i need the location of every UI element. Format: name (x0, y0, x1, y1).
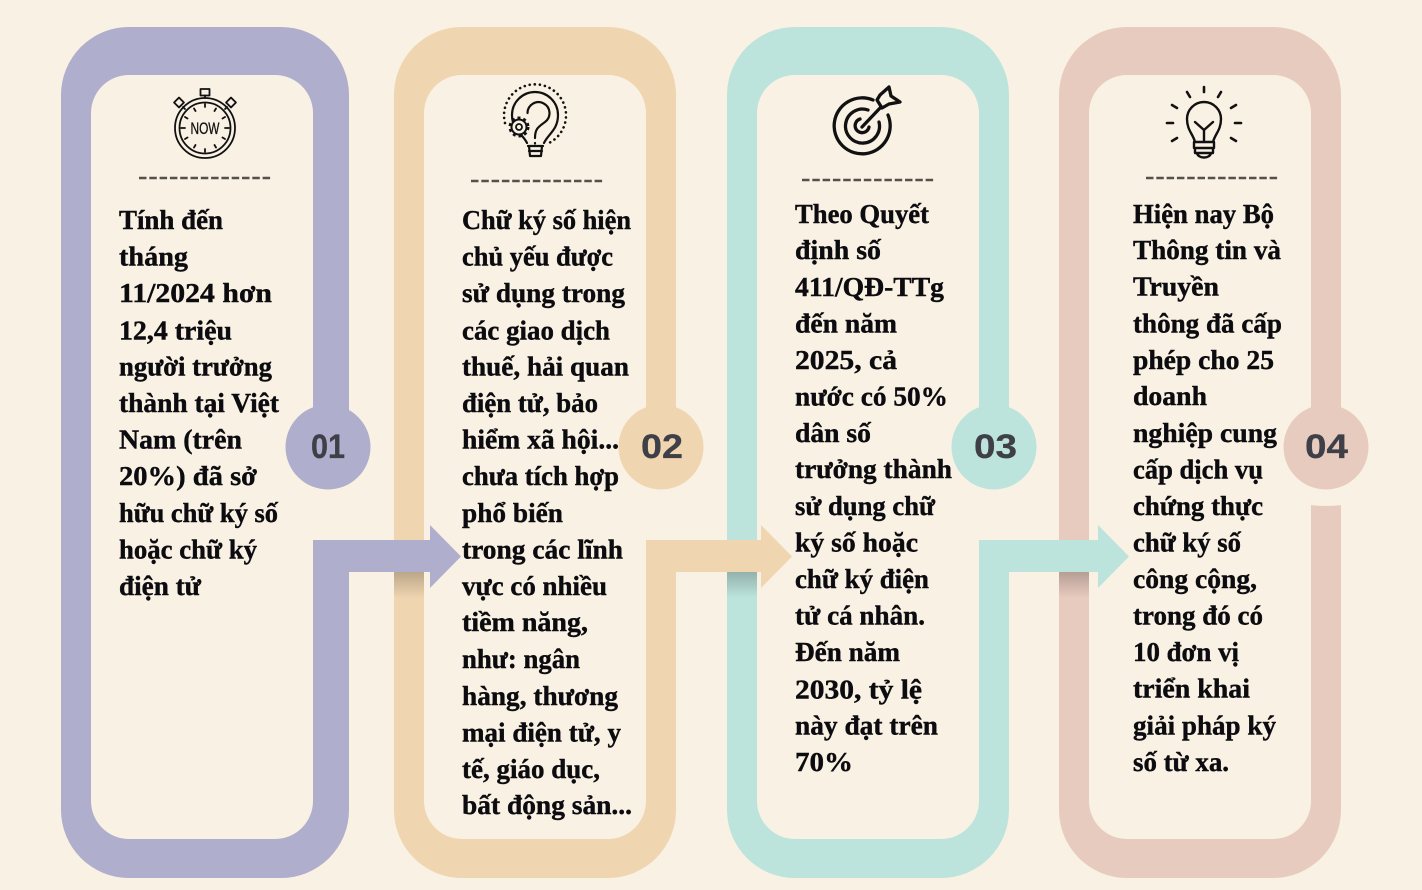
panel 1: purple frame (61, 27, 350, 878)
text block: panel 3: 411/QĐ-TTg (795, 272, 945, 302)
text block: panel 1: người trưởng (119, 351, 272, 381)
text block: panel 2: mại điện tử, y (462, 717, 621, 747)
text block: panel 4: công cộng, (1133, 564, 1257, 594)
text block: panel 4: chữ ký số (1133, 528, 1241, 558)
divider 2 (471, 180, 604, 182)
panel 2: orange frame (394, 27, 677, 878)
text block: panel 3: này đạt trên (795, 710, 938, 740)
text block: panel 3: trưởng thành (795, 454, 952, 484)
text block: panel 3: Đến năm (795, 637, 901, 667)
text block: panel 3: định số (795, 235, 882, 265)
text block: panel 1: hữu chữ ký số (119, 498, 278, 528)
number badge 04: 04 (1305, 428, 1348, 466)
text block: panel 3: 2025, cả (795, 345, 898, 375)
text block: panel 4: nghiệp cung (1133, 418, 1278, 448)
icon: light bulb with question mark and gear (504, 84, 566, 156)
text block: panel 1: 11/2024 hơn (119, 278, 272, 308)
text block: panel 4: thông đã cấp (1133, 308, 1282, 338)
number badge 02: 02 (641, 428, 683, 466)
text block: panel 3: đến năm (795, 308, 898, 338)
text block: panel 3: 2030, tỷ lệ (795, 674, 922, 704)
text block: panel 2 (462, 205, 632, 820)
text block: panel 2: bất động sản... (462, 790, 632, 820)
number badge 02 (618, 404, 704, 490)
text block: panel 4: Truyền (1133, 272, 1219, 302)
text block: panel 4: Thông tin và (1133, 235, 1281, 265)
text block: panel 3: tử cá nhân. (795, 600, 925, 630)
text block: panel 3 (795, 199, 952, 777)
panel 3: teal frame (727, 27, 1010, 878)
arrow: panel 2 to panel 3 (646, 525, 792, 600)
text block: panel 2: chưa tích hợp (462, 461, 619, 491)
text block: panel 2: vực có nhiều (462, 571, 607, 601)
text block: panel 2: tiềm năng, (462, 607, 588, 637)
text block: panel 2: chủ yếu được (462, 242, 613, 272)
text block: panel 1: 20%) đã sở (119, 461, 257, 491)
text block: panel 2: các giao dịch (462, 315, 610, 345)
text block: panel 3: ký số hoặc (795, 528, 918, 558)
number badge 01: 01 (311, 428, 345, 466)
text block: panel 4: triển khai (1133, 674, 1251, 704)
text block: panel 3: 70% (795, 747, 853, 777)
text block: panel 3: nước có 50% (795, 382, 948, 412)
text block: panel 4: doanh (1133, 381, 1207, 411)
icon: target with arrow (834, 87, 900, 154)
text block: panel 2: hiểm xã hội... (462, 425, 619, 455)
text block: panel 1: hoặc chữ ký (119, 534, 257, 564)
text block: panel 3: Theo Quyết (795, 199, 929, 229)
text block: panel 1: Tính đến (119, 205, 223, 235)
icon: light bulb with rays (1167, 87, 1241, 158)
text block: panel 4: số từ xa. (1133, 747, 1229, 777)
text block: panel 2: thuế, hải quan (462, 351, 629, 381)
text block: panel 2: tế, giáo dục, (462, 754, 600, 784)
divider 1 (139, 177, 272, 179)
text block: panel 4: Hiện nay Bộ (1133, 199, 1274, 229)
panel 4: pink frame (1059, 27, 1342, 878)
text block: panel 4 (1133, 199, 1282, 777)
divider 4 (1146, 177, 1279, 179)
text block: panel 2: hàng, thương (462, 681, 618, 711)
arrow: panel 3 to panel 4 (979, 525, 1129, 600)
text block: panel 2: Chữ ký số hiện (462, 205, 631, 235)
divider 3 (802, 179, 935, 181)
text block: panel 4: cấp dịch vụ (1133, 454, 1263, 484)
text block: panel 1: thành tại Việt (119, 388, 279, 418)
icon: stopwatch NOW (174, 89, 236, 158)
text block: panel 1: Nam (trên (119, 425, 242, 455)
arrow: panel 1 to panel 2 (313, 525, 461, 600)
text block: panel 1: tháng (119, 242, 189, 272)
text block: panel 1: 12,4 triệu (119, 315, 232, 345)
text block: panel 2: phổ biến (462, 498, 563, 528)
text block: panel 4: trong đó có (1133, 600, 1263, 630)
text block: panel 2: như: ngân (462, 644, 580, 674)
text block: panel 4: phép cho 25 (1133, 345, 1274, 375)
text block: panel 2: điện tử, bảo (462, 388, 598, 418)
text block: panel 4: chứng thực (1133, 491, 1263, 521)
text block: panel 4: giải pháp ký (1133, 710, 1276, 740)
text block: panel 3: chữ ký điện (795, 564, 929, 594)
number badge 03: 03 (974, 428, 1017, 466)
number badge 03 (952, 404, 1036, 490)
text block: panel 1: điện tử (119, 571, 202, 601)
text block: panel 3: dân số (795, 418, 872, 448)
number badge 01 (286, 404, 370, 490)
text block: panel 1 (119, 205, 279, 601)
text block: panel 2: sử dụng trong (462, 278, 626, 308)
text block: panel 3: sử dụng chữ (795, 491, 936, 521)
text block: panel 4: 10 đơn vị (1133, 637, 1239, 667)
icon: stopwatch NOW: NOW (190, 120, 220, 138)
number badge 04 (1284, 404, 1368, 490)
text block: panel 2: trong các lĩnh (462, 534, 623, 564)
